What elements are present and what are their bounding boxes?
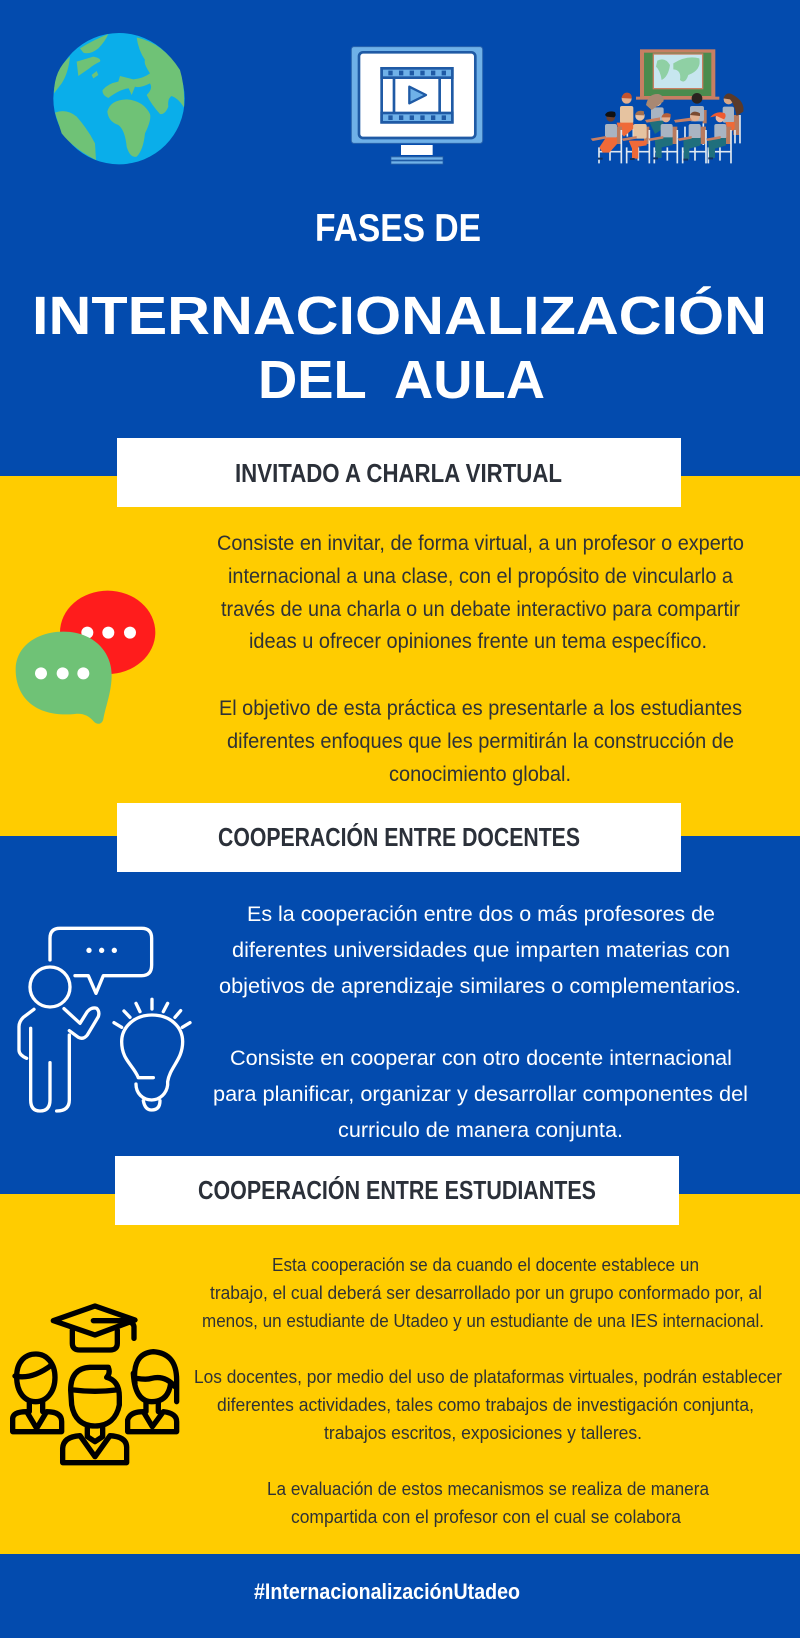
text block: section 2 description: curriculo de manera conjunta. (338, 1118, 623, 1142)
text block: section 3 description: menos, un estudiante de Utadeo y un estudiante de una IES internacional. (202, 1310, 764, 1331)
title: del aula: DEL AULA (258, 350, 545, 410)
text block: section 3 description (194, 1254, 782, 1527)
header background band (0, 0, 800, 476)
text block: section 1 description: El objetivo de esta práctica es presentarle a los estudiantes (219, 697, 742, 720)
front row students (591, 111, 731, 163)
text block: section 2 description (213, 902, 748, 1142)
text block: section 3 description: Esta cooperación se da cuando el docente establece un (272, 1254, 699, 1275)
text block: section 1 description: diferentes enfoques que les permitirán la construcción de (227, 730, 734, 753)
icon: students with graduation cap (13, 1306, 177, 1463)
text block: section 1 description: conocimiento global. (389, 763, 571, 786)
panel: cooperación entre estudiantes (13, 1156, 782, 1527)
panel: cooperación entre docentes (19, 803, 748, 1142)
text block: section 2 description: Es la cooperación entre dos o más profesores de (247, 902, 715, 926)
section 2 background band (0, 836, 800, 1194)
section 3 background band (0, 1194, 800, 1554)
icon: chat bubbles (16, 591, 155, 724)
section 1 background band (0, 476, 800, 836)
text block: section 1 description: ideas u ofrecer opiniones frente un tema específico. (249, 630, 707, 653)
text block: section 3 description: La evaluación de estos mecanismos se realiza de manera (267, 1478, 710, 1499)
icon: monitor with video (351, 47, 483, 165)
text block: section 2 description: diferentes universidades que imparten materias con (232, 938, 730, 962)
heading box: cooperación entre docentes (117, 803, 681, 872)
text block: section 1 description: Consiste en invitar, de forma virtual, a un profesor o experto (217, 532, 744, 555)
text block: section 3 description: trabajo, el cual deberá ser desarrollado por un grupo conformado por, al (210, 1282, 762, 1303)
text block: section 1 description (217, 532, 744, 786)
panel: invitado a charla virtual (16, 438, 744, 786)
text block: section 1 description: internacional a una clase, con el propósito de vincularlo a (228, 565, 733, 588)
text block: section 1 description: través de una charla o un debate interactivo para compartir (221, 598, 740, 621)
icon: globe (53, 33, 185, 164)
text block: section 2 description: objetivos de aprendizaje similares o complementarios. (219, 974, 741, 998)
heading box: cooperación entre estudiantes: COOPERACIÓN ENTRE ESTUDIANTES (198, 1175, 596, 1205)
icon: teacher with speech bubble and light bulb (19, 928, 190, 1111)
footer background band (0, 1554, 800, 1638)
text block: section 2 description: para planificar, organizar y desarrollar componentes del (213, 1082, 748, 1106)
footer hashtag: #InternacionalizaciónUtadeo (254, 1579, 520, 1604)
blackboard with map (636, 49, 719, 100)
back row students (617, 93, 744, 145)
text block: section 3 description: compartida con el profesor con el cual se colabora (291, 1506, 682, 1527)
heading box: cooperación entre docentes: COOPERACIÓN ENTRE DOCENTES (218, 822, 580, 852)
title: fases de: FASES DE (315, 207, 481, 250)
heading box: invitado a charla virtual: INVITADO A CHARLA VIRTUAL (235, 458, 562, 488)
text block: section 3 description: trabajos escritos, exposiciones y talleres. (324, 1422, 642, 1443)
icon: classroom with students (591, 49, 744, 163)
text block: section 2 description: Consiste en cooperar con otro docente internacional (230, 1046, 732, 1070)
heading box: cooperación entre estudiantes (115, 1156, 679, 1225)
text block: section 3 description: diferentes actividades, tales como trabajos de investigación conjunta, (217, 1394, 754, 1415)
title: internacionalización: INTERNACIONALIZACIÓN (32, 286, 767, 346)
heading box: invitado a charla virtual (117, 438, 681, 507)
